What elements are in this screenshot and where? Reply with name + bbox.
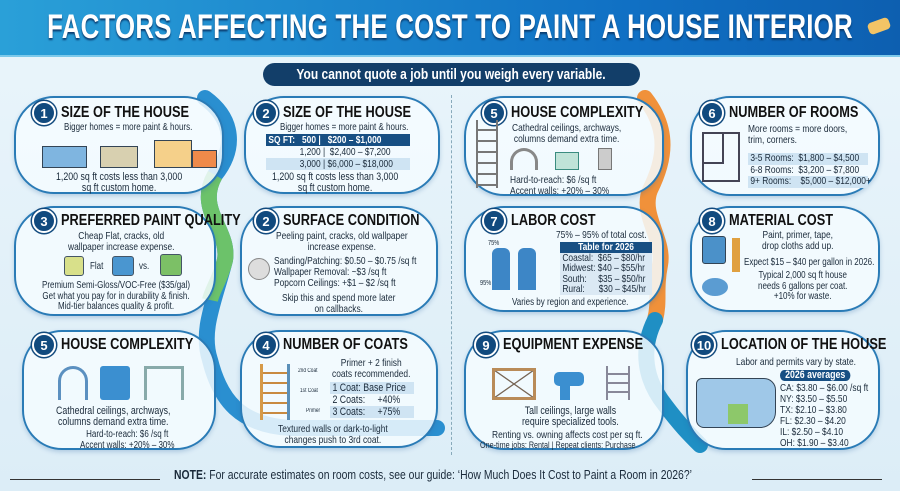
divider [451,95,452,455]
icon: ladder [476,120,498,188]
icon: floor plan [702,132,740,182]
panel 2 surface condition: increase expense. [308,241,376,253]
panel 1 size of the house: 1,200 sq ft costs less than 3,000 [56,171,182,183]
heading 1 [30,100,189,126]
panel 8 material cost: +10% for waste. [774,291,831,302]
heading 4 [252,332,408,358]
panel 2 size table: 1,200 sq ft costs less than 3,000 [272,171,398,183]
panel 7 labor cost [464,206,664,312]
icon: arches columns [58,366,184,400]
panel 4 number of coats: Primer [306,408,320,414]
heading 3: 3 [40,214,48,228]
subtitle pill: You cannot quote a job until you weigh every variable. [296,66,606,83]
panel 9 equipment: Tall ceilings, large walls [525,405,616,417]
icon: US map [696,378,776,428]
panel 5 house complexity right: Cathedral ceilings, archways, [512,122,621,134]
state averages [780,369,868,449]
coats table [330,382,414,418]
labor table: Rural: $30 – $45/hr [562,283,646,295]
panel 5 house complexity left [22,330,216,450]
state averages: NY: $3.50 – $5.50 [780,393,847,405]
panel 9 equipment [464,330,664,450]
state averages: 2026 averages [785,369,845,381]
panel 2 size table: sq ft custom home. [298,182,372,194]
heading 5 right [480,100,643,126]
heading 4: NUMBER OF COATS [283,336,408,353]
rooms table: 9+ Rooms: $5,000 – $12,000+ [750,175,871,187]
panel 4 number of coats: Textured walls or dark-to-light [278,423,388,435]
panel 4 number of coats: Primer + 2 finish [341,357,402,369]
heading 6: 6 [708,106,716,120]
labor table [560,242,652,294]
panel 9 equipment: Renting vs. owning affects cost per sq ft. [492,429,643,441]
heading 3: PREFERRED PAINT QUALITY [61,212,241,229]
panel 10 location: Labor and permits vary by state. [736,356,856,368]
heading 5 [30,332,193,358]
icon: paint roller top right [867,17,891,35]
heading 2 [252,100,411,126]
panel 6 number of rooms: trim, corners. [748,134,797,146]
heading surface [252,208,420,234]
panel 1 size of the house: Bigger homes = more paint & hours. [64,122,192,133]
icon: painters [480,240,536,290]
labor table: South: $35 – $50/hr [562,272,645,284]
panel 2 surface condition [240,206,438,316]
heading 8 [698,208,833,234]
panel 5 house complexity right: columns demand extra time. [514,133,619,145]
panel 4 number of coats [240,330,438,448]
panel 3 paint quality: wallpaper increase expense. [68,241,174,253]
heading 7: 7 [490,214,498,228]
panel 7 labor cost: 75% – 95% of total cost. [556,229,647,241]
coats table: 1 Coat: Base Price [332,382,406,394]
icon: painters: 75% [488,240,499,247]
heading 9 [472,332,643,358]
labor table: Table for 2026 [578,241,634,253]
icon: scaffold sprayer ladder [492,368,536,400]
panel 6 number of rooms [690,96,880,196]
icon: ladder [260,364,290,420]
panel 9 equipment: require specialized tools. [522,416,619,428]
heading 2: SIZE OF THE HOUSE [283,104,411,121]
coats table: 3 Coats: +75% [332,406,400,418]
size table [266,134,410,170]
heading 10 [690,332,886,358]
state averages: FL: $2.30 – $4.20 [780,415,846,427]
title banner [0,0,900,57]
heading 5 right: 5 [490,106,498,120]
panel 1 size of the house [14,96,224,194]
subtitle pill [263,63,640,86]
panel 2 surface condition: Popcorn Ceilings: +$1 – $2 /sq ft [274,277,396,289]
heading 3 [30,208,241,234]
rooms table: 3-5 Rooms: $1,800 – $4,500 [750,152,859,164]
panel 4 number of coats: changes push to 3rd coat. [285,434,381,446]
panel 1 size of the house: sq ft custom home. [82,182,156,194]
panel 3 paint quality [14,206,216,316]
panel 2 surface condition: on callbacks. [314,303,363,315]
heading 7: LABOR COST [511,212,596,229]
panel 4 number of coats: 1st Coat [300,388,318,394]
size table: SQ FT: 500 | $200 – $1,000 [268,134,381,146]
heading 5: HOUSE COMPLEXITY [61,336,193,353]
panel 4 number of coats: coats recommended. [332,368,410,380]
state averages: OH: $1.90 – $3.40 [780,437,849,449]
heading 7 [480,208,596,234]
panel 5 house complexity right [464,96,664,196]
icon: paint can brush tape [702,236,726,264]
panel 8 material cost [690,206,880,312]
heading 9: 9 [482,338,490,352]
heading 2: 2 [262,106,270,120]
icon: houses [42,140,217,168]
heading 8: MATERIAL COST [729,212,833,229]
panel 2 size table: Bigger homes = more paint & hours. [280,122,408,133]
heading surface: SURFACE CONDITION [283,212,420,229]
heading 10: LOCATION OF THE HOUSE [721,336,886,353]
panel 5 house complexity left: Accent walls: +20% – 30% [80,440,174,450]
panel 3 paint quality: Get what you pay for in durability & finish. [42,290,190,302]
heading 5: 5 [40,338,48,352]
icon: paint cans: Flat [90,261,103,272]
panel 2 surface condition: Sanding/Patching: $0.50 – $0.75 /sq ft [274,255,416,267]
labor table: Midwest: $40 – $55/hr [562,262,645,274]
panel 5 house complexity right: Hard-to-reach: $6 /sq ft [510,174,596,186]
size table: 3,000 | $6,000 – $18,000 [300,158,393,170]
panel 5 house complexity left: columns demand extra time. [58,416,168,428]
panel 7 labor cost: Varies by region and experience. [512,297,628,308]
panel 5 house complexity right: Accent walls: +20% – 30% [510,185,609,197]
panel 8 material cost: Paint, primer, tape, [762,229,833,241]
panel 5 house complexity left: Cathedral ceilings, archways, [56,405,170,417]
heading 8: 8 [708,214,716,228]
title: FACTORS AFFECTING THE COST TO PAINT A HOUSE INTERIOR [47,8,853,46]
heading 6: NUMBER OF ROOMS [729,104,858,121]
icon: painters: 95% [480,280,491,287]
panel 9 equipment: One-time jobs: Rental | Repeat clients: Purchase [480,440,636,450]
heading 6 [698,100,858,126]
panel 3 paint quality: Mid-tier balances quality & profit. [58,301,174,312]
note: NOTE: For accurate estimates on room costs, see our guide: ‘How Much Does It Cost to Paint a Room in 2026?’ [174,467,692,482]
labor table: Coastal: $65 – $80/hr [562,252,645,264]
panel 2 surface condition: Skip this and spend more later [282,292,395,304]
panel 8 material cost: Expect $15 – $40 per gallon in 2026. [744,257,874,268]
coats table: 2 Coats: +40% [332,394,400,406]
icon: paint cans [64,254,182,276]
state averages: CA: $3.80 – $6.00 /sq ft [780,382,868,394]
size table: 1,200 | $2,400 – $7,200 [300,146,391,158]
panel 8 material cost: Typical 2,000 sq ft house [758,270,847,281]
heading 5 right: HOUSE COMPLEXITY [511,104,643,121]
panel 2 size table [244,96,440,194]
heading 10: 10 [697,338,711,352]
rooms table: 6-8 Rooms: $3,200 – $7,800 [750,164,859,176]
panel 8 material cost: needs 6 gallons per coat. [758,280,847,292]
panel 5 house complexity left: Hard-to-reach: $6 /sq ft [86,429,168,440]
state averages: TX: $2.10 – $3.80 [780,404,847,416]
heading 9: EQUIPMENT EXPENSE [503,336,643,353]
heading 1: SIZE OF THE HOUSE [61,104,189,121]
icon: paint cans: vs. [139,261,149,272]
state averages: IL: $2.50 – $4.10 [780,426,843,438]
heading 4: 4 [262,338,270,352]
panel 3 paint quality: Premium Semi-Gloss/VOC-Free ($35/gal) [42,280,190,291]
panel 6 number of rooms: More rooms = more doors, [748,123,847,135]
panel 2 surface condition: Wallpaper Removal: ~$3 /sq ft [274,266,386,278]
panel 2 surface condition: Peeling paint, cracks, old wallpaper [276,230,408,242]
icon: crack [248,258,270,280]
panel 8 material cost: drop cloths add up. [762,240,833,252]
heading 1: 1 [40,106,48,120]
panel 3 paint quality: Cheap Flat, cracks, old [78,230,164,242]
rooms table [748,152,871,188]
panel 10 location [686,330,880,450]
icon: arch, greenhouse, column [510,148,612,170]
panel 4 number of coats: 2nd Coat [298,368,317,374]
heading surface: 2 [262,214,270,228]
